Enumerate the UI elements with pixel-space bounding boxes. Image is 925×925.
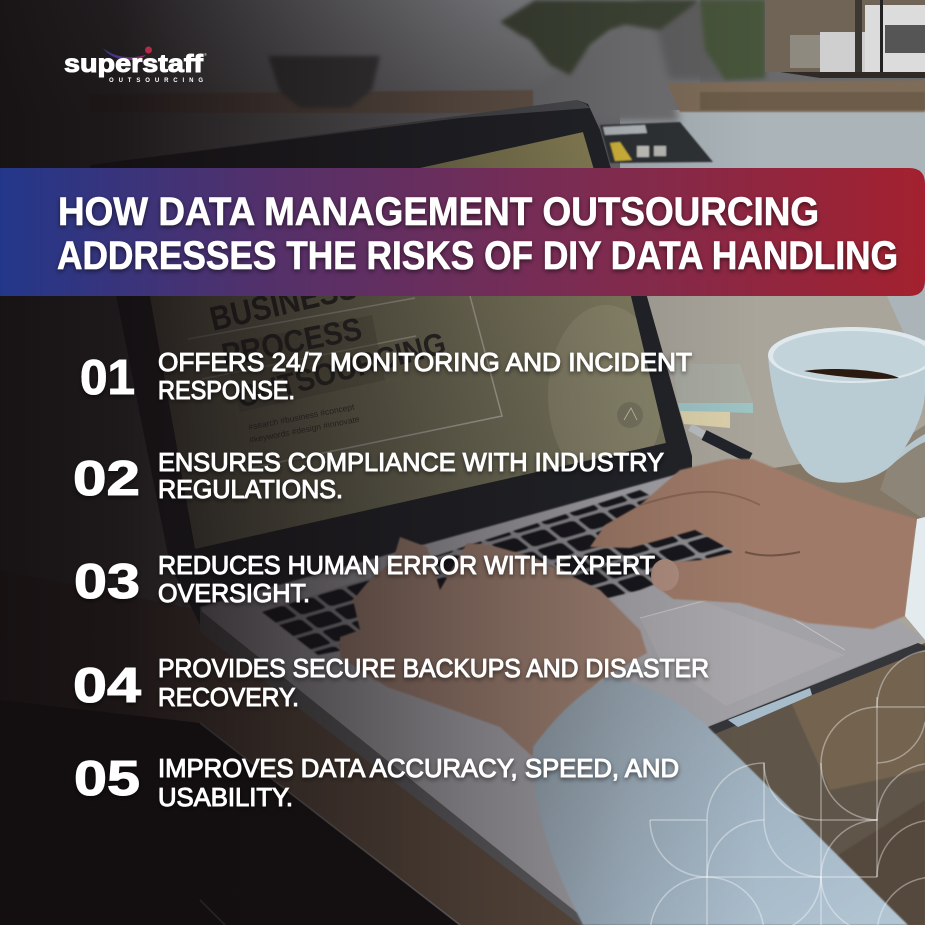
keyboard [262, 490, 745, 655]
screen headline text: OUTSOURCING [233, 325, 449, 415]
list item 03 [74, 550, 655, 609]
laptop lid [90, 100, 692, 625]
screen headline text: BUSINESS [206, 268, 361, 339]
logo tagline: OUTSOURCING [109, 78, 203, 84]
list item 01: OFFERS 24/7 MONITORING AND INCIDENT [158, 347, 692, 377]
desk wood right [640, 296, 925, 660]
list item 05: USABILITY. [158, 782, 293, 812]
banner background [0, 168, 925, 296]
list item 02: 02 [73, 452, 140, 506]
screen small hashtags: #search #business #concept [247, 401, 356, 432]
heading: HOW DATA MANAGEMENT OUTSOURCING [58, 190, 819, 234]
screen frame lines [188, 296, 502, 470]
title banner [0, 168, 925, 296]
coffee cup [768, 327, 925, 483]
logo registered mark: ® [204, 52, 207, 57]
laptop base [200, 470, 925, 913]
list item 04: PROVIDES SECURE BACKUPS AND DISASTER [158, 653, 709, 683]
sticky notes [673, 364, 753, 428]
list item 05: IMPROVES DATA ACCURACY, SPEED, AND [158, 753, 679, 783]
list item 01 [80, 347, 692, 405]
background objects: plant, vase, shelf, window [90, 0, 925, 163]
list item 04 [73, 653, 709, 713]
list item 04: 04 [73, 659, 141, 713]
list item 05: 05 [74, 752, 140, 806]
list item 02 [73, 447, 664, 506]
list item 02: ENSURES COMPLIANCE WITH INDUSTRY [158, 447, 664, 477]
screen headline text: PROCESS [218, 310, 365, 373]
list item 01: 01 [80, 351, 135, 405]
decorative geometric line pattern [650, 650, 925, 925]
right shirt cuff [905, 517, 925, 640]
list item 04: RECOVERY. [158, 682, 299, 712]
logo wordmark: superstaff [64, 50, 204, 78]
logo: superstaff outsourcing [64, 46, 207, 84]
list item 01: RESPONSE. [158, 375, 295, 405]
wood and dark tablet at bottom [0, 570, 600, 925]
screen small hashtags: #keywords #design #innovate [248, 414, 361, 445]
pen [690, 427, 750, 458]
list item 02: REGULATIONS. [158, 474, 343, 504]
logo swoosh [103, 48, 146, 60]
logo dot [145, 46, 152, 54]
list item 05 [74, 752, 679, 812]
heading [57, 190, 898, 278]
left hand [340, 537, 647, 757]
trackpad [640, 600, 845, 706]
lower wall behind desk [620, 110, 925, 410]
list item 03: 03 [74, 555, 140, 609]
wood lower right [708, 643, 925, 925]
right hand [590, 459, 917, 629]
screen headline text [210, 296, 445, 406]
laptop screen [138, 132, 666, 549]
list item 03: REDUCES HUMAN ERROR WITH EXPERT [158, 550, 655, 580]
list item 03: OVERSIGHT. [158, 578, 310, 608]
shirt sleeve [533, 678, 908, 925]
